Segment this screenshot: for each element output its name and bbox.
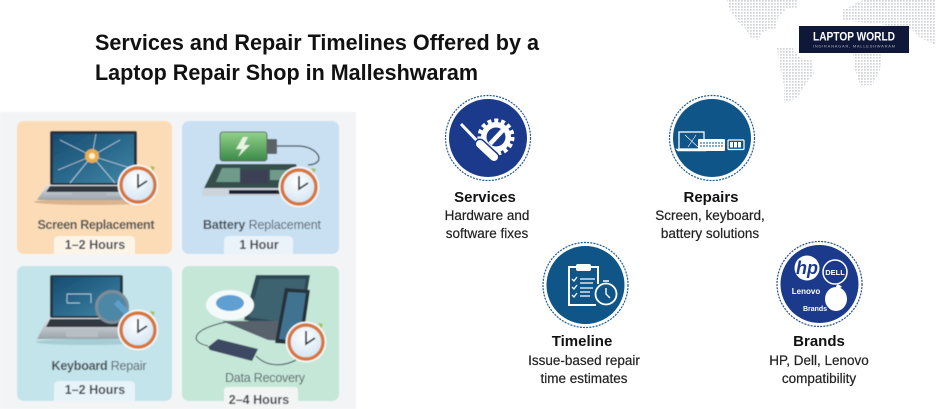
duration pill (54, 381, 135, 401)
title: Services and Repair Timelines Offered by a (95, 30, 540, 55)
icon: brand logos: Lenovo (792, 287, 820, 296)
title (95, 30, 540, 85)
duration pill: 1–2 Hours (65, 238, 125, 252)
world map dotted background (727, 0, 936, 103)
label: Data Recovery (225, 371, 306, 385)
card: data recovery (182, 266, 339, 409)
item: brands (769, 242, 869, 386)
card: battery replacement (182, 121, 339, 254)
panel: repair timeline cards (0, 112, 356, 409)
battery and circuit board (202, 132, 319, 196)
laptop with magnifier (36, 275, 140, 345)
description (445, 208, 529, 241)
icon: brand logos (777, 242, 862, 326)
logo: Laptop World: INDIRANAGAR, MALLESHWARAM (813, 44, 895, 48)
duration pill: 1–2 Hours (65, 383, 125, 397)
description (655, 208, 765, 241)
heading: Services (454, 189, 516, 206)
heading: Repairs (683, 189, 739, 206)
description: HP, Dell, Lenovo (769, 353, 869, 368)
description: Issue-based repair (528, 353, 640, 368)
item: repairs (655, 96, 765, 241)
label: Keyboard Repair (52, 359, 146, 373)
title: Laptop Repair Shop in Malleshwaram (95, 60, 478, 85)
icon: screwdriver and gear (446, 96, 530, 180)
card: keyboard repair (17, 266, 172, 401)
clock icon (118, 310, 158, 350)
icon: brand logos: DELL (825, 268, 845, 277)
icon: brand logos: hp (796, 258, 818, 278)
description: Screen, keyboard, (655, 208, 765, 223)
heading: Timeline (552, 333, 612, 350)
description: software fixes (446, 226, 529, 241)
logo: Laptop World: LAPTOP WORLD (813, 32, 895, 44)
duration pill (54, 236, 135, 254)
description: battery solutions (661, 226, 759, 241)
label: Battery Replacement (203, 218, 322, 232)
duration pill (224, 387, 298, 409)
description: Hardware and (445, 208, 529, 223)
clock icon (278, 166, 320, 208)
duration pill: 1 Hour (239, 238, 279, 252)
icon: clipboard and stopwatch (543, 242, 628, 328)
description: compatibility (782, 371, 856, 386)
item: services (445, 96, 530, 241)
description: time estimates (540, 371, 628, 386)
icon: laptop, keyboard, battery (670, 96, 754, 180)
label: Screen Replacement (38, 218, 155, 232)
heading: Brands (793, 333, 845, 350)
clock icon (118, 164, 158, 206)
description (528, 353, 640, 386)
laptop with cracked screen (34, 131, 150, 205)
description (769, 353, 869, 386)
duration pill: 2–4 Hours (229, 393, 289, 407)
duration pill (224, 236, 293, 254)
item: timeline (528, 242, 640, 386)
icon: brand logos: Brands (803, 306, 827, 313)
card: screen replacement (17, 121, 172, 254)
laptop, tablet, cloud and hub (196, 275, 310, 365)
logo: Laptop World (799, 26, 909, 53)
clock icon (286, 322, 326, 362)
